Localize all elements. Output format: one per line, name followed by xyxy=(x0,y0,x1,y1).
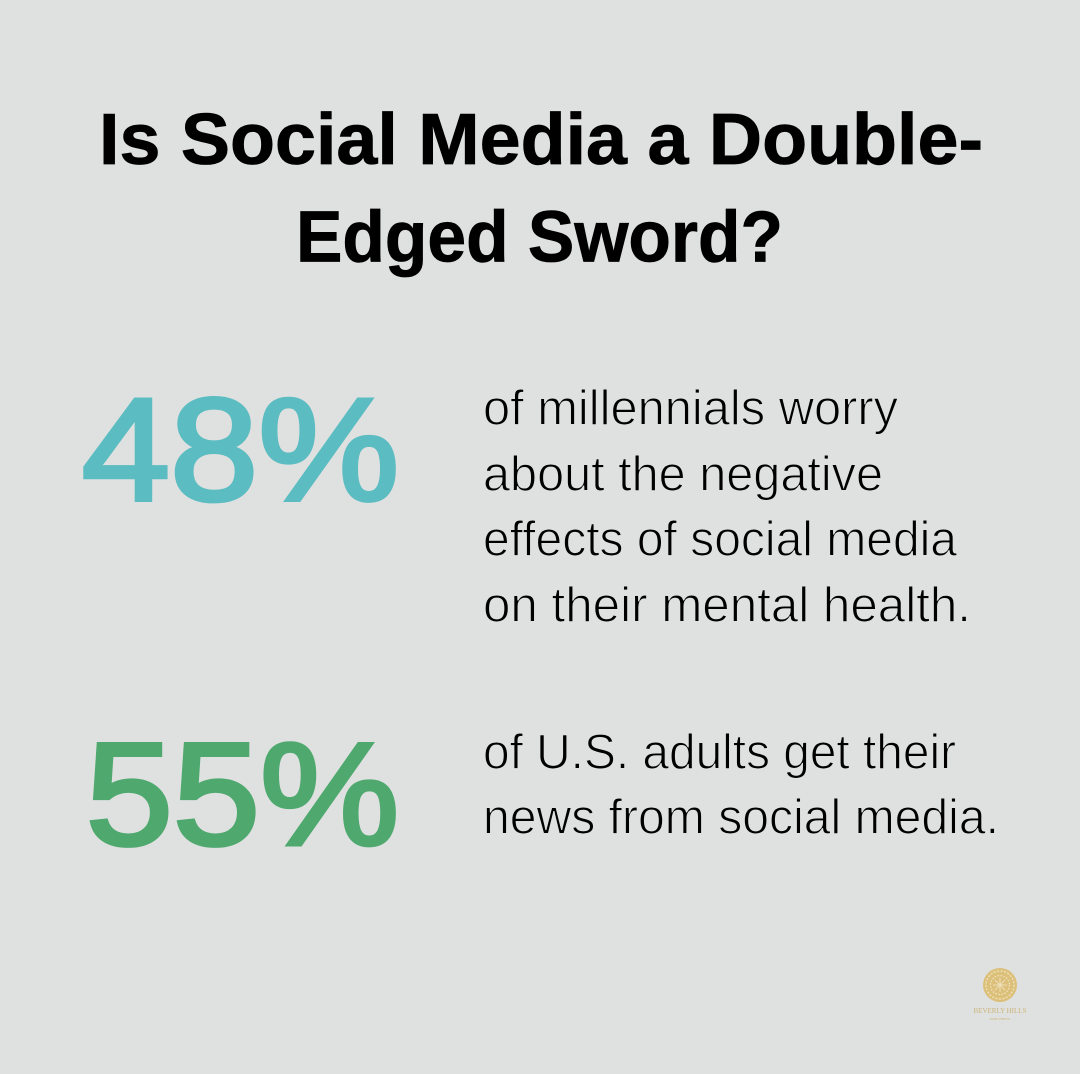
title xyxy=(99,100,983,278)
title: Is Social Media a Double- xyxy=(99,100,983,180)
text block: news statistic description: of U.S. adults get their xyxy=(483,724,956,780)
text block: millennials statistic description: of millennials worry xyxy=(483,380,898,436)
text block: millennials statistic description: on their mental health. xyxy=(483,578,971,632)
text block: news statistic description xyxy=(483,724,999,844)
icon: gold ornamental medallion xyxy=(983,968,1017,1002)
text block: millennials statistic description: about the negative xyxy=(483,446,883,502)
logo sub-wordmark: PUBLISHING xyxy=(990,1017,1011,1021)
logo: Beverly Hills Publishing xyxy=(974,968,1026,1021)
statistic: 55%: 55% xyxy=(86,712,399,876)
title: Edged Sword? xyxy=(296,198,783,278)
text block: news statistic description: news from social media. xyxy=(483,790,999,844)
logo wordmark: BEVERLY HILLS xyxy=(974,1006,1026,1015)
text block: millennials statistic description xyxy=(483,380,971,632)
text block: millennials statistic description: effects of social media xyxy=(483,512,957,566)
statistic: 48%: 48% xyxy=(82,368,399,531)
